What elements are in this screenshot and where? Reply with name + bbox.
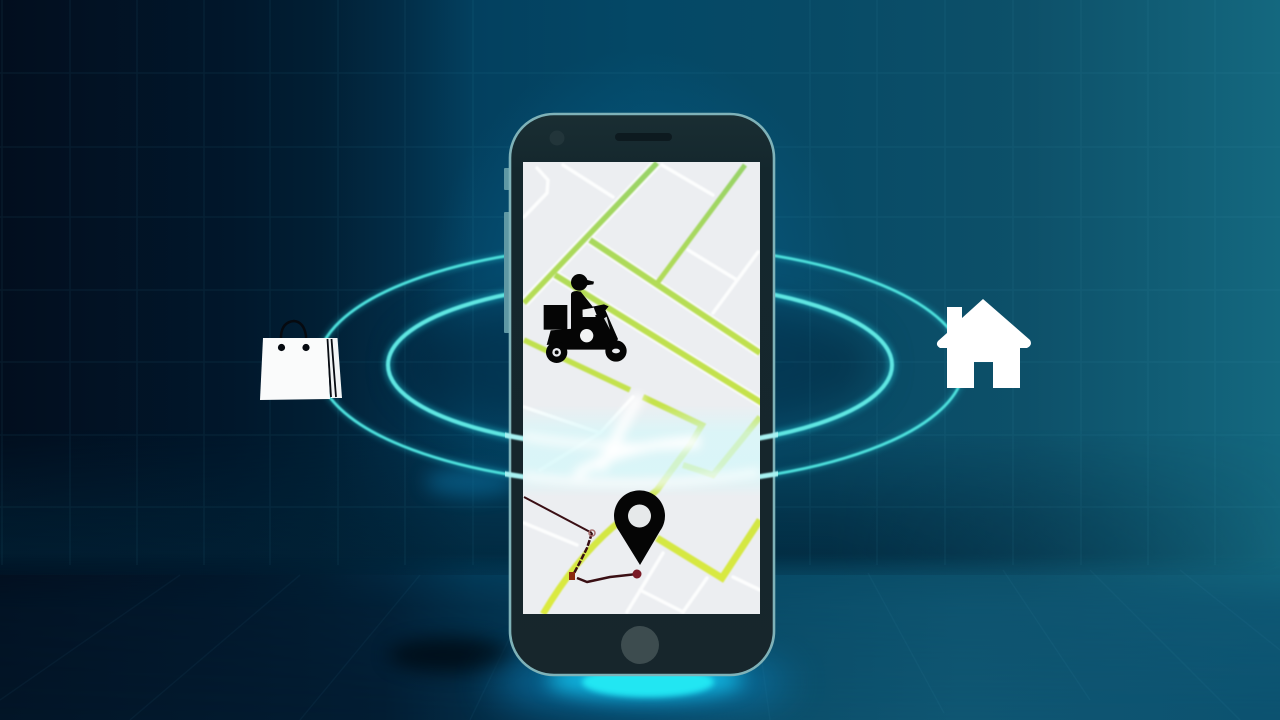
icon: location pin bbox=[614, 490, 665, 565]
inner ring bbox=[388, 282, 892, 448]
icon: delivery scooter rider bbox=[544, 274, 627, 363]
map screen bbox=[515, 155, 770, 621]
icon: house bbox=[937, 299, 1031, 388]
speaker bbox=[615, 133, 672, 141]
green road halos bbox=[524, 163, 770, 408]
glow beneath phone bbox=[490, 658, 790, 706]
phone shadow on floor bbox=[388, 637, 512, 673]
ring glow crossing the screen bbox=[523, 395, 760, 497]
glowing orbit rings bbox=[318, 245, 964, 485]
front camera bbox=[550, 130, 564, 146]
ring glow over phone bezel bbox=[505, 431, 778, 480]
delivery route line bbox=[524, 497, 642, 582]
home button bbox=[621, 626, 659, 664]
phone body bbox=[510, 114, 774, 675]
white streets bbox=[524, 165, 760, 612]
green roads bbox=[524, 163, 770, 614]
outer ring bbox=[318, 245, 964, 485]
icon: shopping bag bbox=[260, 321, 342, 400]
side glow left of phone bbox=[425, 468, 515, 496]
smartphone bbox=[504, 112, 778, 676]
side buttons bbox=[504, 168, 510, 333]
